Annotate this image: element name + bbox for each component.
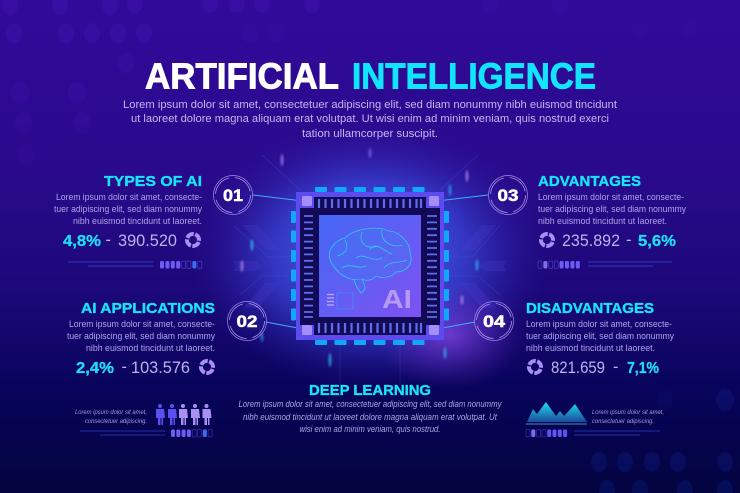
icon: donut 1 [185, 232, 201, 248]
center glow [190, 120, 550, 390]
badge 02: 02 [236, 313, 258, 331]
badge 01 [214, 176, 252, 214]
note with mountain chart [526, 402, 664, 437]
light streaks [241, 148, 478, 367]
badge 04: 04 [483, 313, 506, 331]
AI label: AI [382, 284, 412, 314]
note with people: Lorem ipsum dolor sit amet, [75, 409, 147, 416]
panel: types of AI: TYPES OF AI [104, 173, 202, 190]
note with mountain chart: Lorem ipsum dolor sit amet, [592, 409, 664, 416]
badge 03 [488, 176, 528, 214]
note with people: consectetuer adipiscing. [85, 418, 147, 425]
panel: advantages: Lorem ipsum dolor sit amet, consecte- [538, 192, 684, 202]
lower right purple glow [375, 280, 525, 390]
panel: advantages [538, 173, 686, 250]
panel: types of AI: 390.520 [118, 232, 177, 250]
panel: disadvantages: - [613, 358, 618, 376]
icon: donut 2 [199, 359, 215, 375]
note with people [75, 404, 212, 437]
panel: advantages: nibh euismod tincidunt ut laoreet. [538, 216, 667, 226]
panel: advantages: tuer adipiscing elit, sed diam nonummy [538, 204, 686, 214]
panel: types of AI: nibh euismod tincidunt ut laoreet. [73, 216, 202, 226]
panel: disadvantages: DISADVANTAGES [526, 300, 654, 317]
panel: advantages: 235.892 [562, 232, 620, 250]
panel: disadvantages: tuer adipiscing elit, sed diam nonummy [526, 331, 674, 341]
note with mountain chart: consectetuer adipiscing. [592, 418, 654, 425]
panel: AI applications: 103.576 [131, 359, 190, 377]
panel: advantages: ADVANTAGES [538, 173, 641, 190]
panel: disadvantages: 7,1% [627, 360, 659, 377]
title: INTELLIGENCE [352, 56, 596, 96]
icon: people [156, 404, 212, 425]
icon: donut 3 [539, 232, 555, 248]
panel: disadvantages [526, 300, 674, 377]
intro paragraph [123, 99, 617, 140]
panel: types of AI: 4,8% [63, 233, 101, 250]
badge 03: 03 [498, 187, 518, 205]
panel: AI applications: nibh euismod tincidunt ut laoreet. [86, 343, 215, 353]
panel: disadvantages: 821.659 [551, 359, 605, 377]
panel: AI applications: 2,4% [76, 360, 114, 377]
panel: types of AI: tuer adipiscing elit, sed diam nonummy [54, 204, 202, 214]
intro paragraph: tation ullamcorper suscipit. [302, 128, 438, 140]
panel: deep learning [238, 382, 502, 434]
badge 04 [474, 302, 514, 340]
panel: AI applications [67, 300, 215, 377]
icon: brain [329, 228, 411, 293]
connector lines [253, 195, 488, 329]
panel: types of AI: Lorem ipsum dolor sit amet, consecte- [56, 192, 202, 202]
panel: advantages: - [626, 231, 632, 249]
panel: advantages: 5,6% [638, 233, 676, 250]
AI chip [291, 187, 449, 345]
progress 3 [538, 261, 672, 268]
icon: donut 4 [527, 359, 543, 375]
panel: deep learning: DEEP LEARNING [309, 382, 431, 399]
intro paragraph: Lorem ipsum dolor sit amet, consectetuer adipiscing elit, sed diam nonummy nibh euismod tincidunt [123, 99, 617, 111]
panel: types of AI: - [106, 231, 111, 249]
panel: types of AI [54, 173, 202, 250]
badge 02 [228, 302, 266, 340]
panel: AI applications: Lorem ipsum dolor sit amet, consecte- [69, 319, 215, 329]
panel: deep learning: nibh euismod tincidunt ut laoreet dolore magna aliquam erat volutpat. Ut [243, 412, 497, 422]
panel: AI applications: AI APPLICATIONS [81, 300, 215, 317]
background circuit shapes [233, 155, 507, 385]
chip pads [296, 192, 444, 340]
panel: AI applications: tuer adipiscing elit, sed diam nonummy [67, 331, 215, 341]
panel: disadvantages: Lorem ipsum dolor sit amet, consecte- [526, 319, 672, 329]
panel: deep learning: Lorem ipsum dolor sit amet, consectetuer adipiscing elit, sed diam nonummy [238, 399, 502, 409]
title: ARTIFICIAL [145, 56, 339, 96]
panel: AI applications: - [122, 358, 127, 376]
intro paragraph: ut laoreet dolore magna aliquam erat volutpat. Ut wisi enim ad minim veniam, quis nostrud exerci [131, 113, 609, 125]
panel: deep learning: wisi enim ad minim veniam, quis nostrud. [300, 424, 440, 434]
progress 1 [68, 261, 202, 268]
panel: disadvantages: nibh euismod tincidunt ut laoreet. [526, 343, 655, 353]
badge 01: 01 [223, 187, 243, 205]
title [145, 56, 596, 96]
